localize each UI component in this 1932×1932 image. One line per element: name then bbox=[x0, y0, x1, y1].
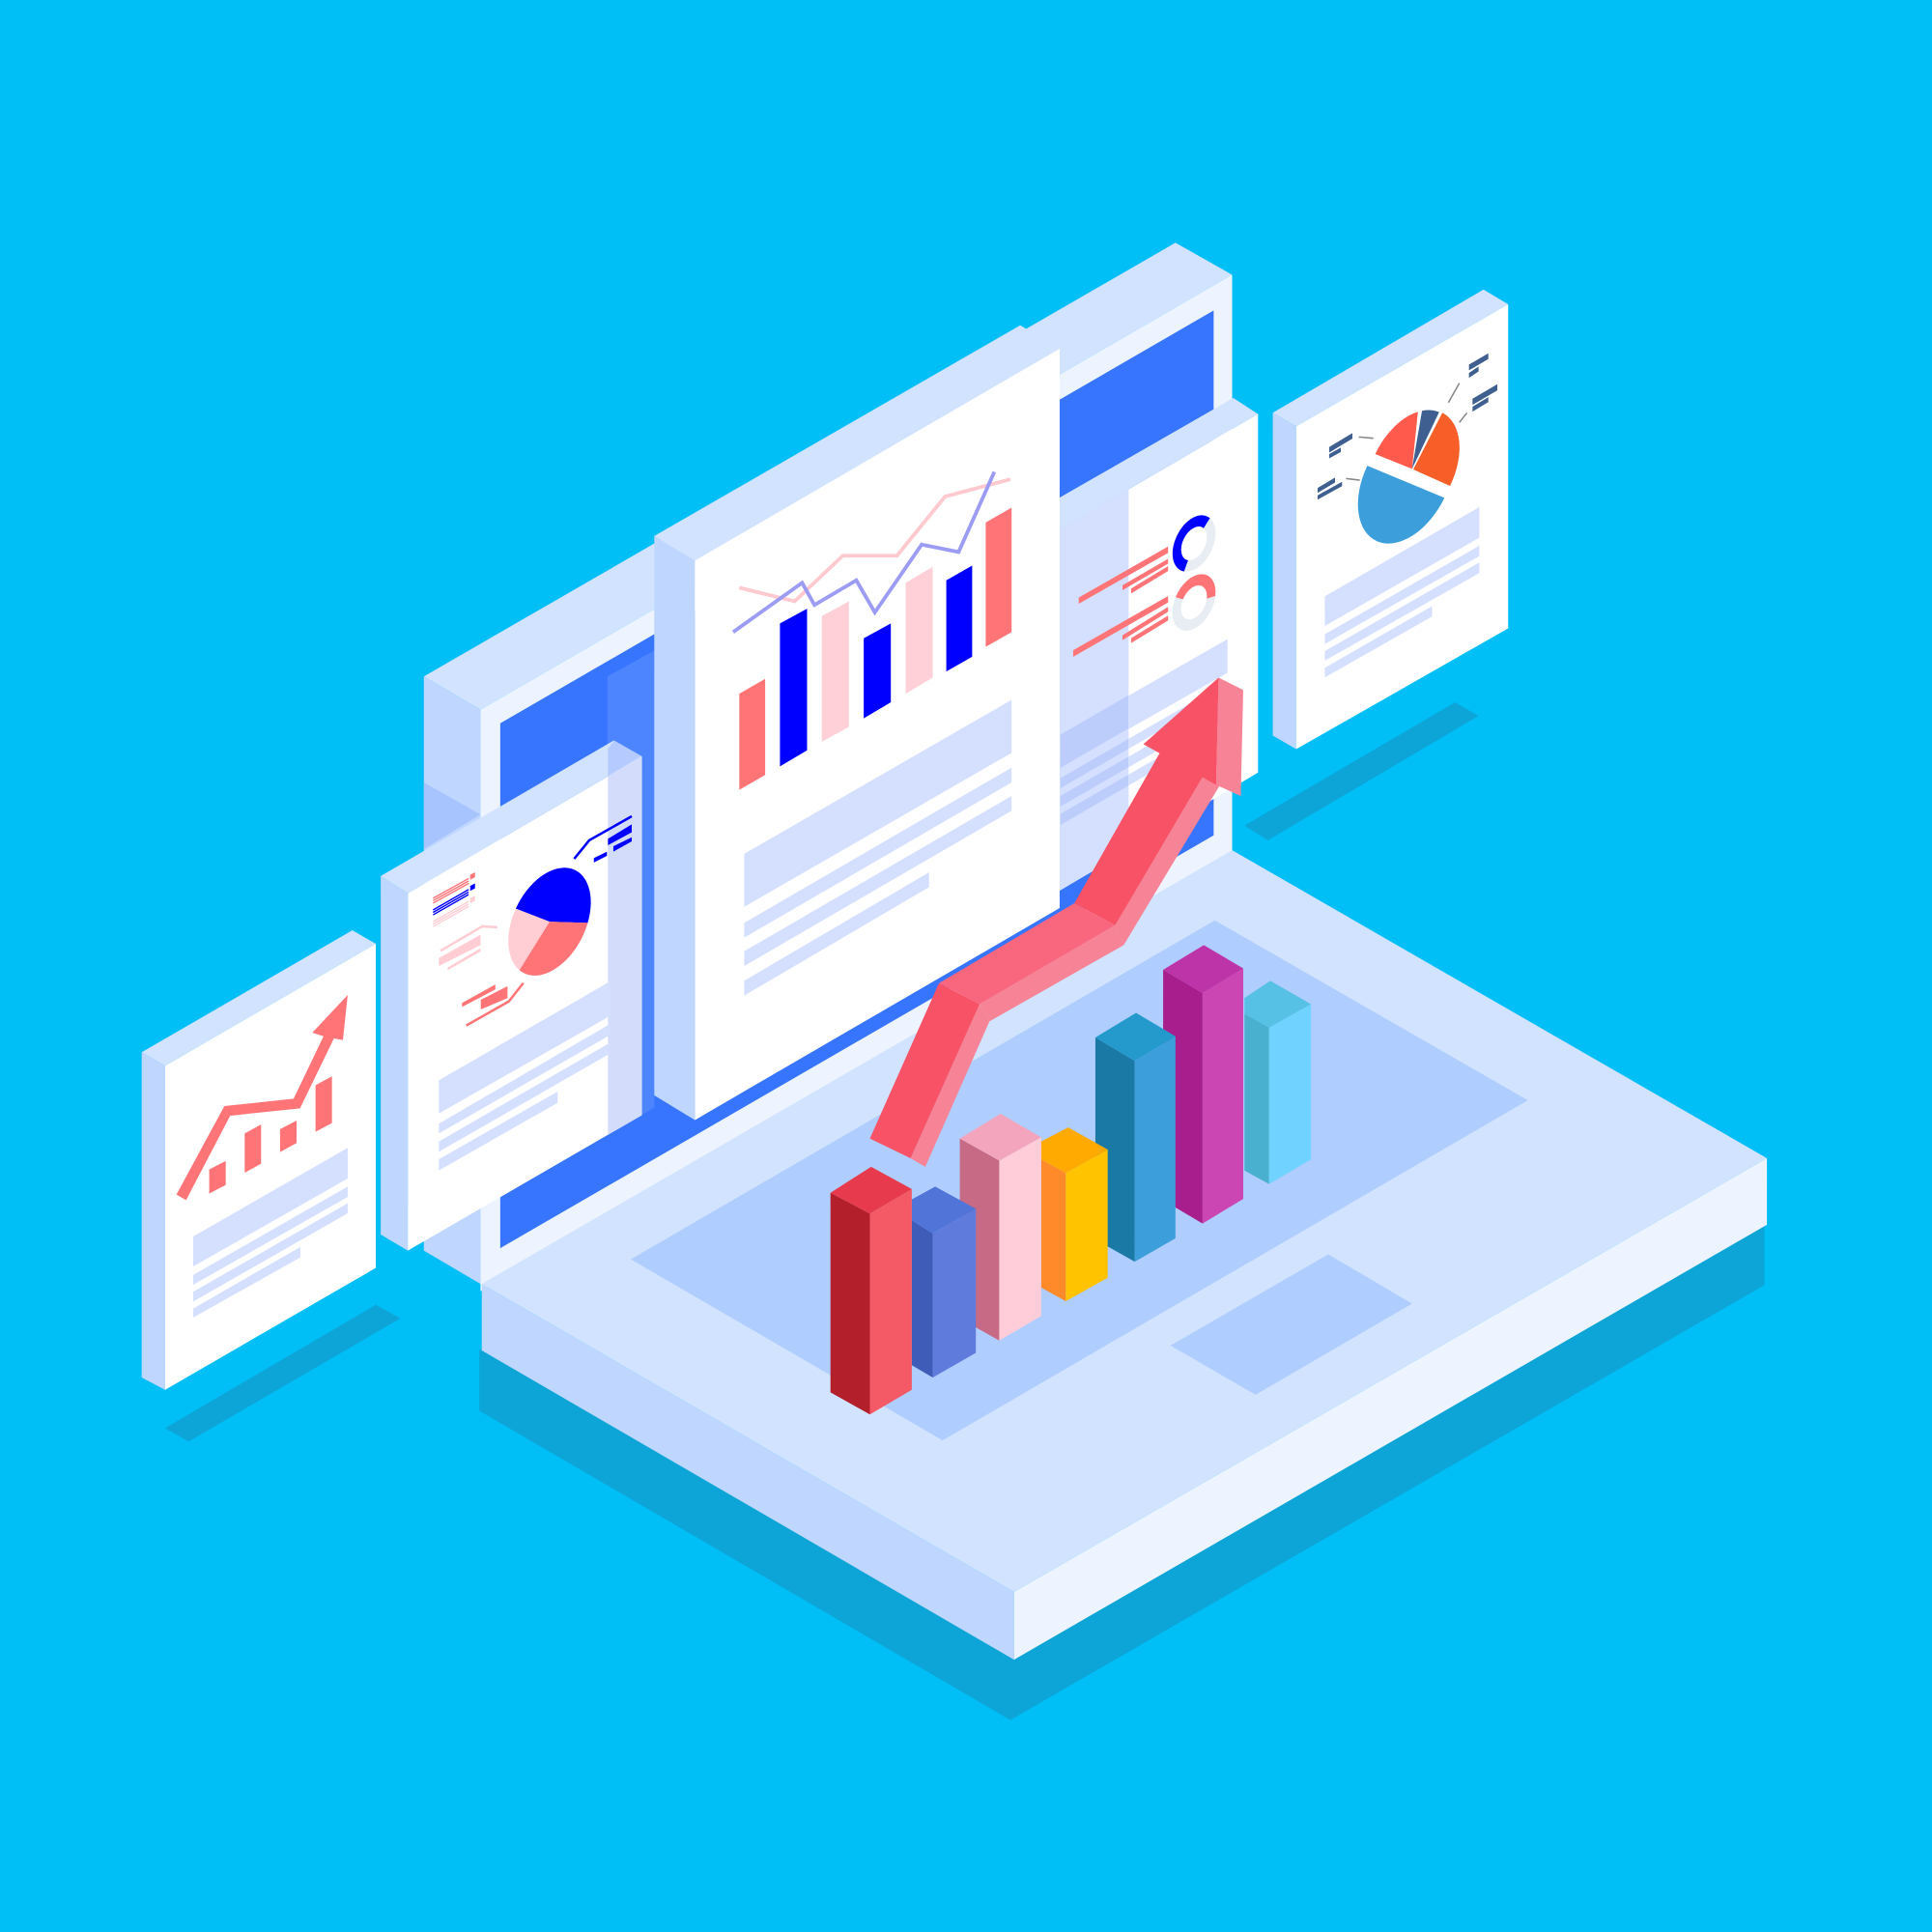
arrow: rising red arrow bbox=[870, 678, 1243, 1167]
pink trend line bbox=[739, 479, 1010, 601]
donut charts bbox=[1177, 514, 1211, 632]
screen display bbox=[500, 310, 1213, 1248]
red bar bbox=[831, 1167, 912, 1414]
report text bars bbox=[439, 981, 611, 1171]
magenta bar bbox=[1163, 945, 1243, 1224]
panel: left growth card bbox=[142, 930, 376, 1390]
left card shadow bbox=[165, 1305, 401, 1441]
right card shadow bbox=[1244, 702, 1479, 840]
pie labels bbox=[1318, 354, 1497, 499]
cyan bar bbox=[1244, 980, 1311, 1184]
trackpad bbox=[1171, 1254, 1412, 1395]
red callout bbox=[462, 983, 524, 1026]
3D bar chart bbox=[831, 945, 1311, 1414]
report text bars bbox=[1061, 639, 1228, 825]
laptop base bbox=[482, 850, 1767, 1660]
report text bars bbox=[744, 699, 1011, 996]
laptop shadow bbox=[479, 1226, 1765, 1720]
indigo bar bbox=[912, 1186, 976, 1378]
pink callout bbox=[439, 926, 497, 970]
blue bar bbox=[1095, 1012, 1176, 1262]
pink bar bbox=[960, 1114, 1041, 1341]
bar chart bbox=[739, 508, 1011, 790]
panel: main report bbox=[654, 326, 1060, 1120]
pie chart bbox=[508, 852, 591, 991]
panel: right pie card bbox=[1273, 290, 1508, 750]
pie leader lines bbox=[1346, 384, 1467, 480]
growth arrow bbox=[177, 995, 348, 1200]
panel: donut report bbox=[1057, 398, 1258, 892]
blue callout bbox=[574, 816, 632, 863]
laptop screen bbox=[424, 242, 1233, 1292]
purple trend line bbox=[733, 472, 994, 632]
legend stripes bbox=[433, 872, 475, 926]
panel: left pie report bbox=[381, 741, 642, 1251]
card text bars bbox=[193, 1148, 348, 1318]
donut labels bbox=[1073, 547, 1168, 657]
keyboard panel bbox=[631, 921, 1528, 1440]
card text bars bbox=[1324, 507, 1479, 677]
yellow bar bbox=[1041, 1127, 1108, 1301]
exploded pie chart bbox=[1358, 403, 1460, 562]
small bars bbox=[210, 1076, 332, 1194]
